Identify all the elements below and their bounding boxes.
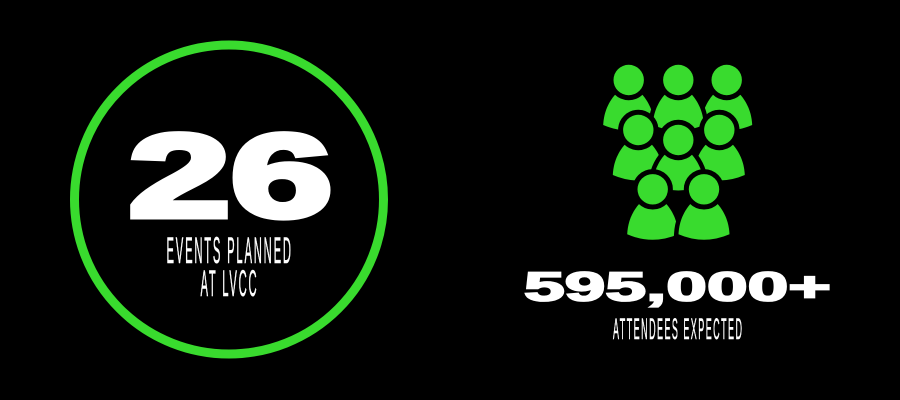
label: events planned: EVENTS PLANNED: [166, 229, 291, 271]
big number 595,000+: 595,000+: [524, 264, 831, 310]
icon: crowd of people: [603, 65, 752, 240]
panel: attendees stat: [524, 65, 831, 346]
big number 26: 26: [128, 110, 332, 242]
label: attendees expected: ATTENDEES EXPECTED: [613, 312, 742, 346]
green ring: [74, 45, 384, 354]
label: at LVCC: AT LVCC: [200, 262, 257, 304]
panel: events stat: [74, 45, 384, 354]
